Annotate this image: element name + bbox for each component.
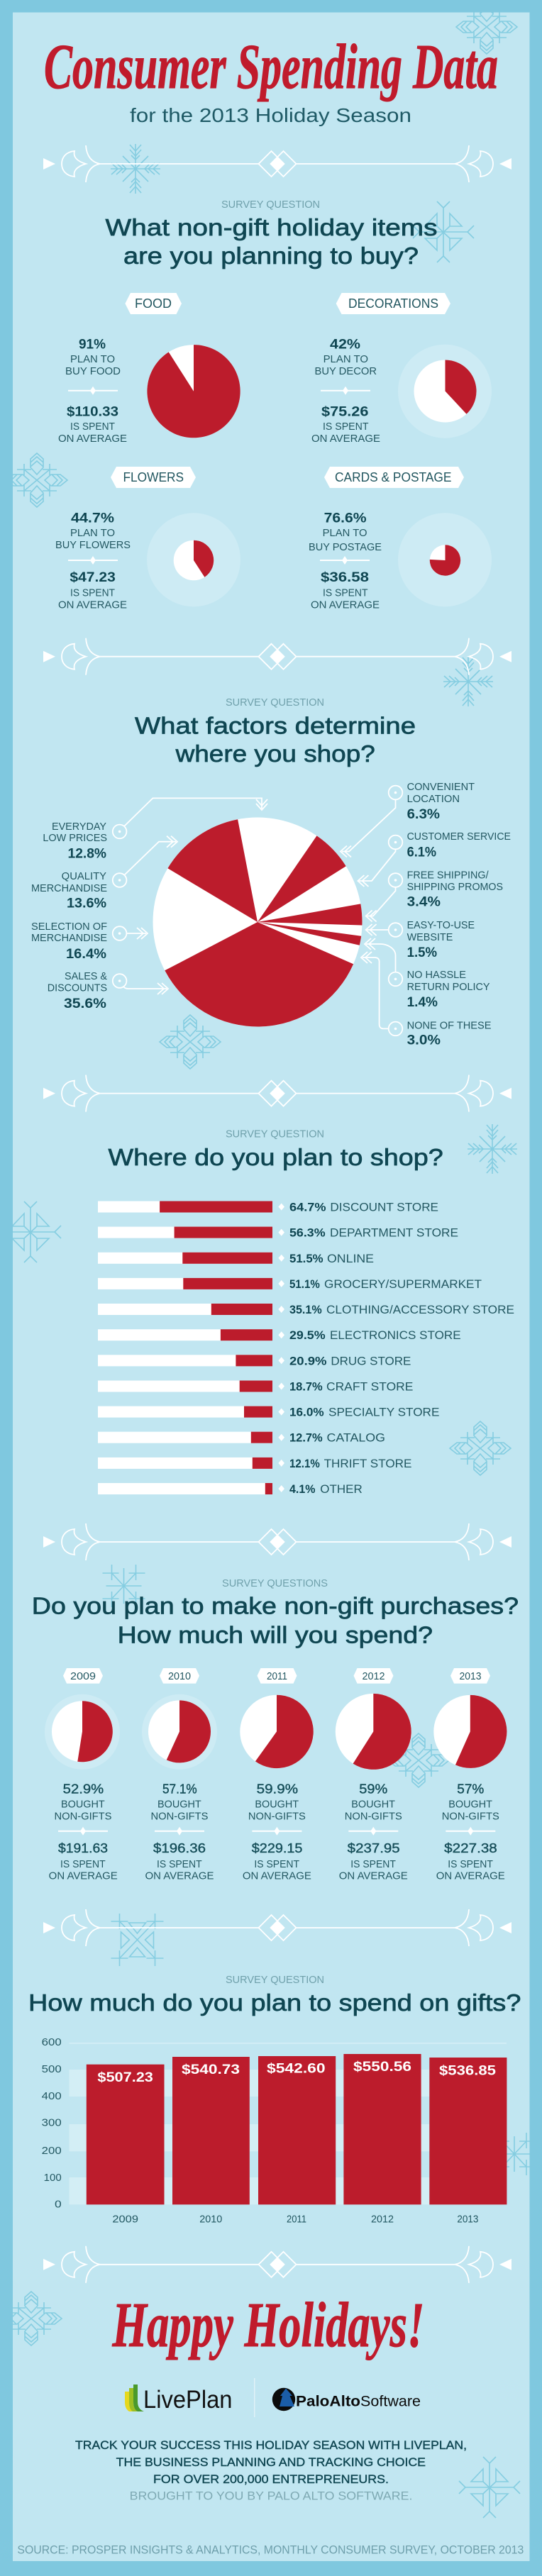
cards and postage block: IS SPENT xyxy=(323,588,368,599)
food block: 91% xyxy=(79,338,106,352)
divider 1 xyxy=(43,145,511,182)
bar values: $542.60 xyxy=(267,2062,326,2077)
heading: How much will you spend? xyxy=(118,1621,433,1648)
year labels: 2009 xyxy=(112,2214,138,2225)
column 2012: IS SPENT xyxy=(350,1859,396,1870)
survey label: SURVEY QUESTION xyxy=(221,199,320,211)
call to action text xyxy=(75,2438,467,2502)
column 2013: NON-GIFTS xyxy=(442,1811,499,1823)
heading xyxy=(105,214,437,269)
logo: LivePlan: LivePlan xyxy=(143,2386,233,2414)
column 2009: IS SPENT xyxy=(60,1859,106,1870)
heading: How much do you plan to spend on gifts? xyxy=(28,1989,521,2016)
decorations block: $75.26 xyxy=(321,405,369,420)
logo: Palo Alto Software xyxy=(272,2388,421,2411)
bar chart: CATALOG xyxy=(326,1432,385,1445)
year labels: 2013 xyxy=(457,2214,478,2225)
heading: Where do you plan to shop? xyxy=(108,1144,443,1170)
icon: snowflake under factors pie xyxy=(160,1015,221,1069)
column 2009: 52.9% xyxy=(63,1782,104,1797)
column 2011: 2011 xyxy=(267,1671,287,1682)
column 2010: 2010 xyxy=(168,1671,191,1682)
logo: Palo Alto Software: Software xyxy=(360,2394,421,2410)
bar chart: 35.1% xyxy=(289,1304,322,1316)
flowers block: ON AVERAGE xyxy=(58,600,127,611)
survey label: SURVEY QUESTION xyxy=(226,696,324,709)
subtitle: for the 2013 Holiday Season xyxy=(130,104,411,126)
decorations block: IS SPENT xyxy=(323,421,369,433)
column 2010: 57.1% xyxy=(162,1782,197,1797)
survey label: SURVEY QUESTIONS xyxy=(222,1577,328,1589)
bar chart: 12.7% xyxy=(289,1432,323,1445)
column 2012: $237.95 xyxy=(348,1841,400,1855)
cards and postage block: $36.58 xyxy=(321,570,369,585)
column 2011: ON AVERAGE xyxy=(243,1871,311,1882)
decorations block: PLAN TO xyxy=(323,354,368,365)
axis labels: 300 xyxy=(42,2118,62,2129)
column 2012: BOUGHT xyxy=(351,1799,395,1811)
panel: non-gift purchases by year xyxy=(32,1577,519,1882)
bar values: $540.73 xyxy=(182,2063,240,2077)
column 2010: $196.36 xyxy=(153,1841,206,1855)
bar chart xyxy=(42,2037,507,2225)
right labels: 6.1% xyxy=(407,845,436,860)
right labels: 1.5% xyxy=(407,945,437,960)
bar chart: CRAFT STORE xyxy=(326,1380,413,1393)
survey label: SURVEY QUESTION xyxy=(226,1128,324,1140)
column 2012: ON AVERAGE xyxy=(339,1871,408,1882)
column 2013: IS SPENT xyxy=(448,1859,493,1870)
bar chart: 51.1% xyxy=(289,1278,320,1291)
icon: snowflake by fifth divider xyxy=(111,1914,163,1966)
panel: non-gift holiday items xyxy=(55,199,492,611)
heading: What factors determine xyxy=(135,712,416,738)
flowers block: BUY FLOWERS xyxy=(55,540,131,551)
right labels: SHIPPING PROMOS xyxy=(407,882,503,893)
bar values: $550.56 xyxy=(353,2060,411,2075)
icon: snowflake right of third heading xyxy=(468,1124,517,1174)
left labels: LOW PRICES xyxy=(43,833,107,844)
panel: factors xyxy=(31,696,511,1048)
food block: $110.33 xyxy=(67,405,118,420)
bar values: $507.23 xyxy=(97,2070,153,2085)
column 2009: NON-GIFTS xyxy=(54,1811,112,1823)
bar chart: DISCOUNT STORE xyxy=(330,1201,438,1214)
left labels: MERCHANDISE xyxy=(31,883,107,894)
food block: FOOD xyxy=(135,296,172,311)
bar chart: ELECTRONICS STORE xyxy=(330,1329,461,1342)
icon: snowflake top right xyxy=(455,13,518,55)
connectors xyxy=(113,786,402,1036)
food block: BUY FOOD xyxy=(65,366,121,377)
left labels: SALES & xyxy=(65,971,107,982)
heading: What non-gift holiday items xyxy=(105,214,437,240)
icon: snowflake at right of bar chart xyxy=(507,2133,529,2175)
food block: PLAN TO xyxy=(70,354,115,365)
axis labels: 400 xyxy=(42,2091,62,2102)
bars xyxy=(87,2054,507,2204)
call to action text: BROUGHT TO YOU BY PALO ALTO SOFTWARE. xyxy=(130,2489,412,2502)
right labels: 3.0% xyxy=(407,1033,441,1048)
left labels xyxy=(31,821,107,1011)
column 2012: 59% xyxy=(359,1782,387,1797)
flowers block: $47.23 xyxy=(70,570,116,585)
year labels: 2010 xyxy=(199,2214,222,2225)
column 2010: IS SPENT xyxy=(157,1859,202,1870)
icon: snowflake bottom right xyxy=(459,2457,520,2518)
column 2011: NON-GIFTS xyxy=(248,1811,306,1823)
heading: are you planning to buy? xyxy=(123,243,419,269)
cards and postage block: BUY POSTAGE xyxy=(309,542,382,553)
axis labels xyxy=(42,2037,62,2211)
column 2011 xyxy=(240,1668,314,1882)
decorations block: 42% xyxy=(330,338,360,352)
bar chart: DEPARTMENT STORE xyxy=(330,1227,458,1240)
column 2009: $191.63 xyxy=(58,1841,108,1855)
bar chart: GROCERY/SUPERMARKET xyxy=(324,1278,482,1291)
column 2009: 2009 xyxy=(70,1671,96,1682)
right labels: CONVENIENT xyxy=(407,782,475,793)
call to action text: THE BUSINESS PLANNING AND TRACKING CHOICE xyxy=(116,2455,426,2469)
divider 6 xyxy=(43,2246,511,2283)
column 2012: NON-GIFTS xyxy=(345,1811,402,1823)
bar chart: 20.9% xyxy=(289,1355,327,1367)
icon: snowflake behind fourth heading xyxy=(102,1565,145,1607)
bar chart: DRUG STORE xyxy=(331,1355,411,1367)
year labels xyxy=(112,2214,478,2225)
divider 2 xyxy=(43,638,511,675)
column 2011: IS SPENT xyxy=(254,1859,299,1870)
icon: snowflake between 2012 and 2013 pies xyxy=(388,1733,449,1787)
left labels: 12.8% xyxy=(68,847,106,862)
right labels: 3.4% xyxy=(407,895,441,910)
decorations block: ON AVERAGE xyxy=(311,433,380,445)
column 2011: $229.15 xyxy=(252,1841,302,1855)
right labels: RETURN POLICY xyxy=(407,982,490,993)
left labels: DISCOUNTS xyxy=(48,982,107,994)
heading: where you shop? xyxy=(175,740,375,767)
icon: snowflake left of happy holidays xyxy=(13,2291,62,2346)
right labels: 6.3% xyxy=(407,807,440,822)
food block xyxy=(58,293,240,445)
bar chart: CLOTHING/ACCESSORY STORE xyxy=(326,1304,514,1316)
right labels: NONE OF THESE xyxy=(407,1020,492,1031)
right labels: FREE SHIPPING/ xyxy=(407,870,490,881)
icon: snowflake by second divider xyxy=(443,657,493,706)
icon: snowflake right of bars xyxy=(450,1421,511,1475)
bar chart: 64.7% xyxy=(289,1201,326,1214)
icon: snowflake left of bars xyxy=(13,1201,61,1262)
decorations block: BUY DECOR xyxy=(315,366,377,377)
axis labels: 200 xyxy=(42,2145,62,2157)
bar chart: THRIFT STORE xyxy=(324,1458,411,1470)
column 2013: 57% xyxy=(457,1782,484,1797)
bar chart: 12.1% xyxy=(289,1458,320,1470)
bar chart: 29.5% xyxy=(289,1329,326,1342)
left labels: EVERYDAY xyxy=(52,821,106,833)
decorations block xyxy=(311,293,492,445)
column 2011: BOUGHT xyxy=(255,1799,299,1811)
bar chart xyxy=(98,1201,514,1496)
cards and postage block xyxy=(309,467,492,611)
bar chart: SPECIALTY STORE xyxy=(328,1406,439,1419)
column 2013 xyxy=(433,1668,507,1882)
divider 4 xyxy=(43,1523,511,1560)
column 2010 xyxy=(142,1668,217,1882)
bar chart: 4.1% xyxy=(289,1483,316,1496)
flowers block: 44.7% xyxy=(71,511,114,526)
column 2013: 2013 xyxy=(460,1671,481,1682)
flowers block xyxy=(55,467,240,611)
column 2012 xyxy=(336,1668,411,1882)
heading xyxy=(135,712,416,767)
call to action text: FOR OVER 200,000 ENTREPRENEURS. xyxy=(153,2472,389,2486)
flowers block: PLAN TO xyxy=(70,528,115,539)
icon: snowflake by first divider xyxy=(111,144,160,194)
column 2012: 2012 xyxy=(362,1671,385,1682)
left labels: 16.4% xyxy=(66,947,106,962)
flowers block: IS SPENT xyxy=(70,588,115,599)
bar values xyxy=(97,2060,496,2085)
year labels: 2012 xyxy=(371,2214,394,2225)
right labels: LOCATION xyxy=(407,794,460,805)
column 2011: 59.9% xyxy=(257,1782,298,1797)
left labels: MERCHANDISE xyxy=(31,933,107,944)
flowers block: FLOWERS xyxy=(123,470,184,484)
axis labels: 0 xyxy=(55,2199,62,2211)
right labels: EASY-TO-USE xyxy=(407,920,475,931)
food block: ON AVERAGE xyxy=(58,433,127,445)
bar chart: ONLINE xyxy=(327,1253,374,1265)
bar chart: 56.3% xyxy=(289,1227,326,1240)
right labels xyxy=(407,782,511,1048)
call to action text: TRACK YOUR SUCCESS THIS HOLIDAY SEASON WITH LIVEPLAN, xyxy=(75,2438,467,2452)
axis labels: 100 xyxy=(44,2172,62,2184)
right labels: CUSTOMER SERVICE xyxy=(407,831,511,843)
food block: IS SPENT xyxy=(70,421,115,433)
divider 5 xyxy=(43,1909,511,1946)
column 2009: ON AVERAGE xyxy=(49,1871,118,1882)
decorations block: DECORATIONS xyxy=(348,296,438,311)
column 2010: NON-GIFTS xyxy=(150,1811,209,1823)
column 2013: ON AVERAGE xyxy=(436,1871,505,1882)
left labels: 13.6% xyxy=(67,896,106,911)
column 2009: BOUGHT xyxy=(61,1799,105,1811)
year labels: 2011 xyxy=(287,2214,306,2225)
logo: Palo Alto Software: PaloAlto xyxy=(296,2394,360,2410)
axis labels: 500 xyxy=(42,2064,62,2075)
left labels: 35.6% xyxy=(64,996,106,1011)
column 2013: BOUGHT xyxy=(448,1799,492,1811)
left labels: SELECTION OF xyxy=(31,921,107,933)
cards and postage block: PLAN TO xyxy=(323,528,367,539)
icon: snowflake left of flowers xyxy=(6,453,67,507)
right labels: 1.4% xyxy=(407,995,438,1010)
panel: gift spending xyxy=(28,1974,521,2225)
left labels: QUALITY xyxy=(62,871,106,882)
pie chart xyxy=(153,817,362,1027)
column 2009 xyxy=(45,1668,120,1882)
icon: snowflake behind first heading xyxy=(413,201,474,262)
column 2013: $227.38 xyxy=(444,1841,497,1855)
divider 3 xyxy=(43,1075,511,1112)
cards and postage block: ON AVERAGE xyxy=(311,600,380,611)
survey label: SURVEY QUESTION xyxy=(226,1974,324,1986)
heading: Do you plan to make non-gift purchases? xyxy=(32,1593,519,1619)
heading xyxy=(32,1593,519,1648)
bar chart: 51.5% xyxy=(289,1253,323,1265)
right labels: NO HASSLE xyxy=(407,970,466,981)
column 2010: BOUGHT xyxy=(157,1799,201,1811)
cards and postage block: 76.6% xyxy=(324,511,367,526)
bar chart: 18.7% xyxy=(289,1380,323,1393)
panel: where do you plan to shop xyxy=(98,1128,514,1496)
column 2010: ON AVERAGE xyxy=(145,1871,214,1882)
bar values: $536.85 xyxy=(439,2063,496,2078)
bar chart: OTHER xyxy=(320,1483,363,1496)
bar chart: 16.0% xyxy=(289,1406,324,1419)
axis labels: 600 xyxy=(42,2037,62,2048)
right labels: WEBSITE xyxy=(407,932,453,943)
cards and postage block: CARDS & POSTAGE xyxy=(335,470,451,484)
